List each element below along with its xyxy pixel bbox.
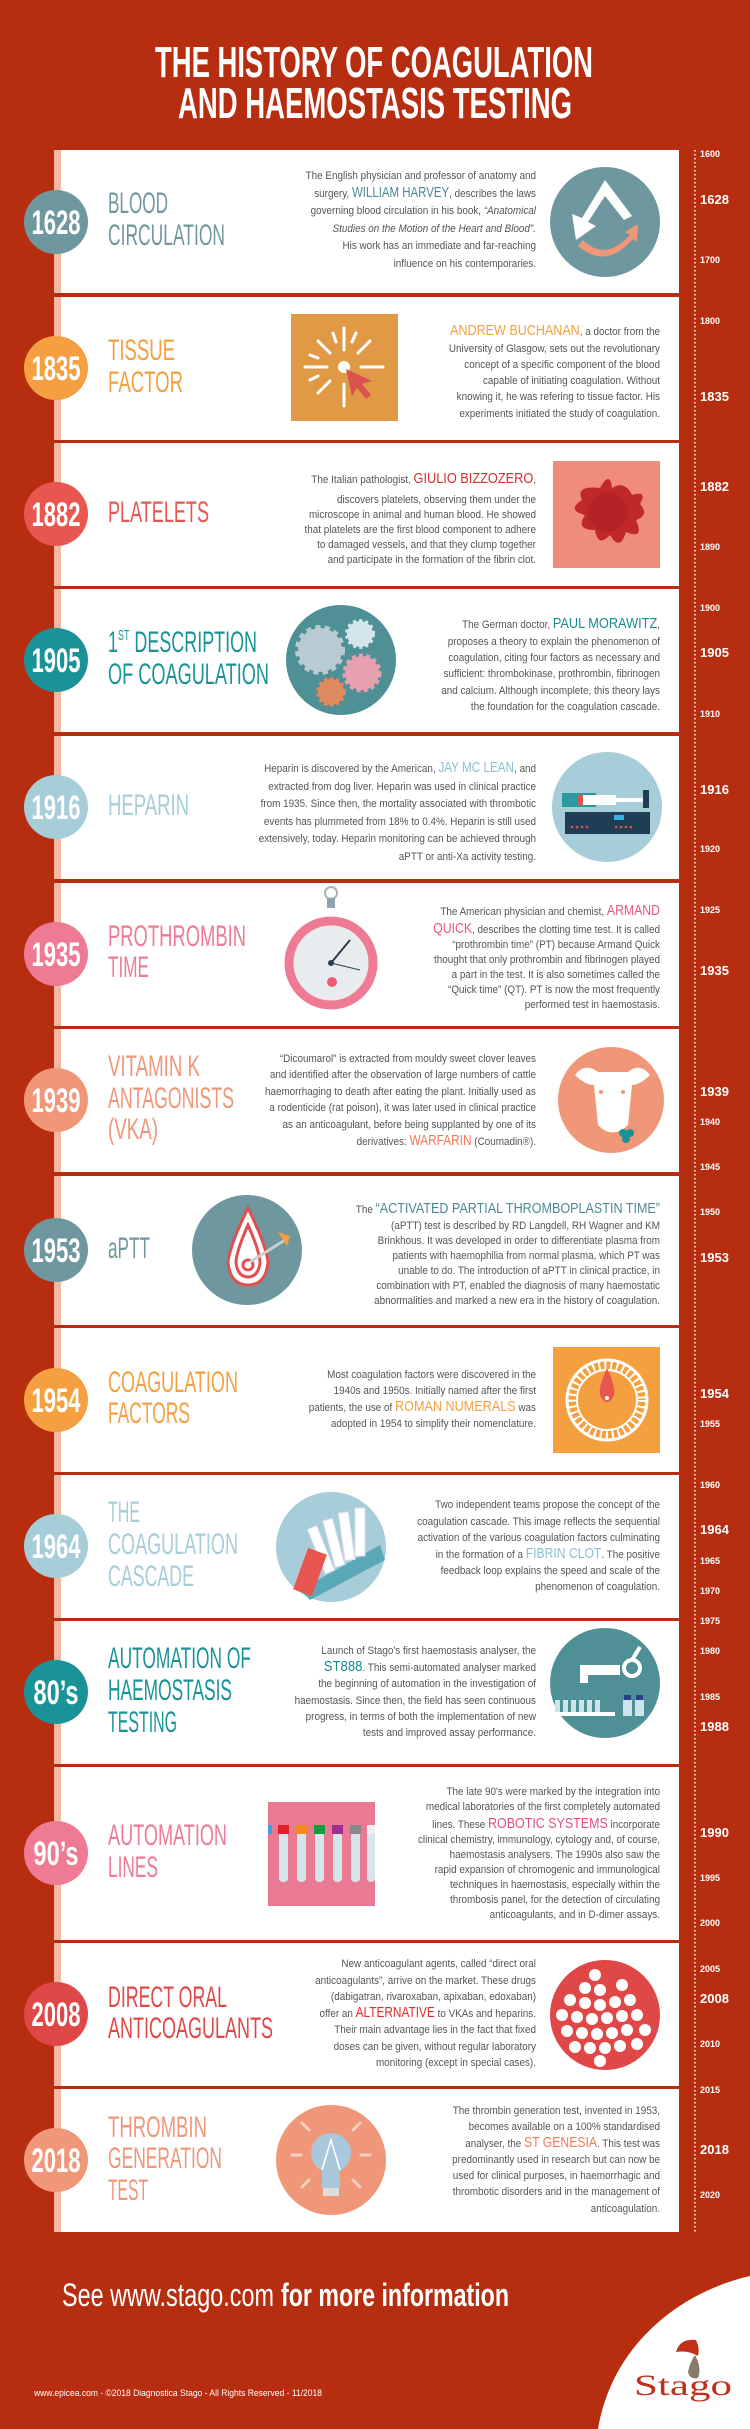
- text block: influence on his contemporaries.: [394, 259, 536, 270]
- heading: [108, 920, 246, 984]
- heading: TIME: [108, 951, 149, 984]
- timeline axis: 1890: [700, 542, 720, 552]
- text block: a part in the test. It is also sometimes called the: [452, 970, 660, 981]
- footer call to action: See www.stago.com: [62, 2277, 274, 2313]
- stago logo corner: [598, 2276, 750, 2429]
- heading: FACTOR: [108, 366, 183, 399]
- text block: that platelets are the first blood component to adhere: [305, 525, 536, 536]
- text block: capable of initiating coagulation. Without: [483, 376, 660, 387]
- text block: as an anticoagulant, before being supplanted by one of its: [283, 1120, 536, 1131]
- panel: 1628 blood circulation: [24, 150, 679, 293]
- text block: The German doctor, PAUL MORAWITZ,: [462, 615, 663, 632]
- timeline axis: 1628: [700, 192, 729, 207]
- heading: AUTOMATION OF: [108, 1642, 251, 1675]
- icon: light bulb: [276, 2105, 386, 2215]
- heading: COAGULATION: [108, 1366, 238, 1399]
- text block: the foundation for the coagulation cascade.: [471, 702, 660, 713]
- timeline axis: 2015: [700, 2085, 720, 2095]
- heading: TISSUE: [108, 334, 175, 367]
- text block: anticoagulants”, arrive on the market. These drugs: [315, 1976, 536, 1987]
- heading: [108, 626, 269, 691]
- heading: (VKA): [108, 1113, 158, 1146]
- badge 90's: 90’s: [34, 1835, 78, 1873]
- text block: “Dicoumarol” is extracted from mouldy sweet clover leaves: [280, 1054, 536, 1065]
- heading: DIRECT ORAL: [108, 1981, 227, 2014]
- badge 2008: [24, 1982, 88, 2046]
- panel: 1835 tissue factor: [24, 297, 679, 440]
- timeline axis: 1995: [700, 1873, 720, 1883]
- icon: syringe pump: [552, 752, 662, 862]
- text block: predominantly used in research but can now be: [452, 2155, 660, 2166]
- panel: 1939 VKA: [24, 1029, 679, 1172]
- badge 1953: [24, 1218, 88, 1282]
- text block: QUICK, describes the clotting time test. It is called: [433, 920, 660, 937]
- text block: (dabigatran, rivaroxaban, apixaban, edoxaban): [331, 1992, 536, 2003]
- timeline axis: 1975: [700, 1616, 720, 1626]
- timeline axis: 2020: [700, 2190, 720, 2200]
- timeline axis: 1965: [700, 1556, 720, 1566]
- text block: lines. These ROBOTIC SYSTEMS incorporate: [432, 1815, 660, 1832]
- badge 1835: [24, 336, 88, 400]
- timeline axis: 1800: [700, 316, 720, 326]
- text block: abnormalities and marked a new era in the history of coagulation.: [374, 1296, 660, 1307]
- text block: The American physician and chemist, ARMAND: [440, 902, 665, 919]
- heading: GENERATION: [108, 2142, 222, 2175]
- icon: circulation arrows: [550, 167, 660, 277]
- timeline axis: 1835: [700, 389, 729, 404]
- badge 1916: [24, 775, 88, 839]
- stago logo corner: Stago: [634, 2369, 732, 2402]
- text block: coagulation, citing four factors as necessary and: [448, 653, 660, 664]
- text block: Two independent teams propose the concept of the: [435, 1500, 660, 1511]
- text block: University of Glasgow, sets out the revolutionary: [449, 344, 661, 355]
- icon: gears: [286, 605, 396, 715]
- badge 1953: 1953: [32, 1232, 80, 1270]
- text block: tests and improved assay performance.: [363, 1728, 536, 1739]
- badge 2018: [24, 2128, 88, 2192]
- timeline axis: 1905: [700, 645, 729, 660]
- text block: sufficient: thrombokinase, prothrombin, fibrinogen: [444, 669, 660, 680]
- panel: 1905 first description: [24, 589, 679, 732]
- text block: surgery, WILLIAM HARVEY, describes the laws: [314, 184, 536, 201]
- text block: activation of the various coagulation factors culminating: [418, 1533, 660, 1544]
- heading: [108, 2111, 222, 2207]
- timeline axis: 1950: [700, 1207, 720, 1217]
- heading: [108, 1819, 227, 1884]
- text block: aPTT or anti-Xa activity testing.: [399, 852, 536, 863]
- text block: from 1935. Since then, the mortality associated with thrombotic: [261, 799, 536, 810]
- badge 1835: 1835: [32, 350, 80, 388]
- timeline axis: 2000: [700, 1918, 720, 1928]
- text block: becomes available on a 100% standardised: [469, 2122, 660, 2133]
- timeline axis: 1980: [700, 1646, 720, 1656]
- panel: 1953 aPTT: [24, 1176, 679, 1325]
- text block: ANDREW BUCHANAN, a doctor from the: [450, 322, 660, 339]
- panel: 90's automation lines: [24, 1767, 679, 1940]
- text block: proposes a theory to explain the phenomenon of: [448, 637, 660, 648]
- heading: HEPARIN: [108, 789, 189, 822]
- text block: analyser, the ST GENESIA. This test was: [465, 2134, 660, 2151]
- heading: [108, 1050, 234, 1146]
- badge 1916: 1916: [32, 789, 80, 827]
- heading: CASCADE: [108, 1560, 194, 1593]
- heading: CIRCULATION: [108, 219, 225, 252]
- text block: 1940s and 1950s. Initially named after the first: [334, 1386, 536, 1397]
- text block: offer an ALTERNATIVE to VKAs and heparins.: [320, 2004, 536, 2021]
- badge 1882: 1882: [32, 496, 80, 534]
- text block: ST888. This semi-automated analyser marked: [324, 1658, 536, 1675]
- timeline axis: 1985: [700, 1692, 720, 1702]
- heading: HAEMOSTASIS: [108, 1674, 232, 1707]
- heading: ANTAGONISTS: [108, 1082, 234, 1115]
- heading: AUTOMATION: [108, 1819, 227, 1852]
- panel: 2008 direct oral anticoagulants: [24, 1943, 679, 2086]
- heading: aPTT: [108, 1232, 150, 1265]
- icon: pills: [550, 1960, 660, 2070]
- badge 1628: 1628: [32, 204, 80, 242]
- text block: clinical chemistry, immunology, cytology and, of course,: [418, 1835, 660, 1846]
- text block: Heparin is discovered by the American, JAY MC LEAN, and: [264, 759, 536, 776]
- badge 1939: [24, 1068, 88, 1132]
- badge 1954: [24, 1368, 88, 1432]
- text block: rapid expansion of chromogenic and immunological: [435, 1865, 660, 1876]
- timeline axis: 1945: [700, 1162, 720, 1172]
- icon: dominoes: [276, 1492, 386, 1602]
- heading: PLATELETS: [108, 496, 209, 529]
- timeline axis: 1988: [700, 1719, 729, 1734]
- text block: knowing it, he was refering to tissue factor. His: [457, 392, 660, 403]
- text block: adopted in 1954 to simplify their nomenclature.: [331, 1419, 536, 1430]
- text block: thought that only prothrombin and fibrinogen played: [434, 955, 660, 966]
- text block: extensively, today. Heparin monitoring can be achieved through: [259, 834, 536, 845]
- text block: and identified after the observation of large numbers of cattle: [270, 1070, 536, 1081]
- icon: stopwatch: [289, 887, 373, 1005]
- text block: events has plummeted from 18% to 0.4%. Heparin is still used: [264, 817, 536, 828]
- timeline axis: 1953: [700, 1250, 729, 1265]
- timeline axis: 1600: [700, 149, 720, 159]
- icon: target drop: [192, 1195, 302, 1305]
- badge 2018: 2018: [32, 2142, 80, 2180]
- badge 1905: 1905: [32, 642, 80, 680]
- text block: thrombosis panel, for the detection of circulating: [450, 1895, 660, 1906]
- timeline axis: 2005: [700, 1964, 720, 1974]
- icon: cow: [558, 1047, 664, 1153]
- heading: [108, 334, 183, 399]
- text block: doses can be given, without regular laboratory: [334, 2042, 537, 2053]
- text block: The thrombin generation test, invented in 1953,: [453, 2106, 660, 2117]
- text block: governing blood circulation in his book, “Anatomical: [311, 206, 536, 217]
- text block: microscope in animal and human blood. He showed: [309, 510, 536, 521]
- icon: tube rack: [268, 1802, 375, 1906]
- timeline axis: 2018: [700, 2142, 729, 2157]
- badge 2008: 2008: [32, 1996, 80, 2034]
- panel: 80's automation of haemostasis testing: [24, 1621, 679, 1764]
- heading: THE: [108, 1496, 140, 1529]
- timeline axis: 1954: [700, 1386, 730, 1401]
- text block: to damaged vessels, and that they clump together: [317, 540, 536, 551]
- text block: unable to do. The introduction of aPTT in clinical practice, in: [398, 1266, 660, 1277]
- text block: concept of a specific component of the blood: [464, 360, 660, 371]
- badge 1964: 1964: [32, 1528, 81, 1566]
- panel: 1964 coagulation cascade: [24, 1475, 679, 1618]
- icon: analyser: [550, 1628, 660, 1738]
- timeline axis: 1939: [700, 1084, 729, 1099]
- timeline axis: 1970: [700, 1586, 720, 1596]
- timeline axis: 1920: [700, 844, 720, 854]
- timeline axis: 1900: [700, 603, 720, 613]
- footer call to action: [62, 2277, 509, 2313]
- badge 80's: 80’s: [34, 1674, 78, 1712]
- text block: The Italian pathologist, GIULIO BIZZOZERO,: [311, 470, 540, 487]
- text block: Most coagulation factors were discovered in the: [327, 1370, 536, 1381]
- text block: patients, the use of ROMAN NUMERALS was: [309, 1398, 536, 1415]
- panel: 1882 platelets: [24, 443, 679, 586]
- text block: (aPTT) test is described by RD Langdell, RH Wagner and KM: [391, 1221, 660, 1232]
- icon: platelet: [553, 461, 660, 568]
- timeline axis: 1990: [700, 1825, 729, 1840]
- heading: COAGULATION: [108, 1528, 238, 1561]
- panel: 1935 prothrombin time: [24, 883, 679, 1026]
- timeline axis: 1955: [700, 1419, 720, 1429]
- text block: the beginning of automation in the investigation of: [318, 1679, 536, 1690]
- timeline axis: 1960: [700, 1480, 720, 1490]
- text block: performed test in haemostasis.: [525, 1000, 660, 1011]
- heading: ANTICOAGULANTS: [108, 2012, 273, 2045]
- badge 90's: [24, 1821, 88, 1885]
- text block: patients with haemophilia from normal plasma, which PT was: [393, 1251, 660, 1262]
- heading: PROTHROMBIN: [108, 920, 246, 953]
- heading: DESCRIPTION: [129, 626, 257, 659]
- panel: 1916 heparin: [24, 736, 679, 879]
- badge 1905: [24, 628, 88, 692]
- text block: and participate in the formation of the fibrin clot.: [328, 555, 536, 566]
- text block: combination with PT, enabled the diagnosis of many haemostatic: [376, 1281, 660, 1292]
- text block: anticoagulation.: [591, 2204, 660, 2215]
- text block: experiments initiated the study of coagulation.: [459, 409, 660, 420]
- text block: Their main advantage lies in the fact that fixed: [334, 2025, 536, 2036]
- badge 1964: [24, 1514, 88, 1578]
- heading: [108, 1496, 238, 1593]
- badge 1935: 1935: [32, 936, 80, 974]
- panel: 1954 coagulation factors: [24, 1328, 679, 1472]
- timeline axis: 1916: [700, 782, 729, 797]
- heading: THROMBIN: [108, 2111, 207, 2144]
- heading: [108, 1366, 238, 1430]
- text block: Studies on the Motion of the Heart and Blood”.: [333, 224, 536, 235]
- heading: LINES: [108, 1851, 158, 1884]
- timeline axis: 1882: [700, 479, 729, 494]
- title: [155, 38, 593, 128]
- text block: medical laboratories of the first completely automated: [426, 1802, 660, 1813]
- text block: discovers platelets, observing them under the: [337, 495, 536, 506]
- text block: in the formation of a FIBRIN CLOT. The positive: [436, 1545, 660, 1562]
- heading: [108, 1981, 273, 2045]
- text block: derivatives: WARFARIN (Coumadin®).: [357, 1132, 536, 1149]
- text block: and calcium. Although incomplete, this theory lays: [441, 686, 660, 697]
- timeline axis: 1910: [700, 709, 720, 719]
- text block: coagulation cascade. This image reflects the sequential: [417, 1517, 660, 1528]
- icon: click burst: [291, 314, 398, 421]
- text block: Launch of Stago's first haemostasis analyser, the: [321, 1646, 536, 1657]
- text block: phenomenon of coagulation.: [535, 1582, 660, 1593]
- heading: VITAMIN K: [108, 1050, 200, 1083]
- text block: a rodenticide (rat poison), it was later used in clinical practice: [269, 1103, 536, 1114]
- badge 80's: [24, 1660, 88, 1724]
- text block: The English physician and professor of anatomy and: [306, 171, 536, 182]
- text block: “prothrombin time” (PT) because Armand Quick: [452, 940, 661, 951]
- text block: Brinkhous. It was developed in order to differentiate plasma from: [378, 1236, 660, 1247]
- heading: ST: [118, 627, 129, 644]
- icon: roman clock: [553, 1347, 660, 1453]
- text block: progress, in terms of both the implementation of new: [306, 1712, 536, 1723]
- timeline axis: 2008: [700, 1991, 729, 2006]
- text block: haemostasis analysers. The 1990s also saw the: [450, 1850, 660, 1861]
- heading: BLOOD: [108, 187, 168, 220]
- text block: monitoring (except in special cases).: [376, 2058, 536, 2069]
- badge 1628: [24, 190, 88, 254]
- text block: anticoagulants, and in D-dimer assays.: [490, 1910, 660, 1921]
- text block: His work has an immediate and far-reaching: [343, 241, 536, 252]
- timeline axis: 2010: [700, 2039, 720, 2049]
- heading: [108, 1642, 251, 1739]
- panel: 2018 thrombin generation test: [24, 2089, 679, 2232]
- text block: The late 90's were marked by the integration into: [446, 1787, 660, 1798]
- text block: haemostasis. Since then, the field has seen continuous: [295, 1696, 536, 1707]
- text block: techniques in haemostasis, especially within the: [450, 1880, 660, 1891]
- text block: haemorrhaging to death after eating the plant. Initially used as: [265, 1087, 536, 1098]
- footer call to action: for more information: [281, 2277, 509, 2313]
- badge 1939: 1939: [32, 1082, 80, 1120]
- badge 1954: 1954: [32, 1382, 81, 1420]
- badge 1882: [24, 482, 88, 546]
- timeline axis: 1964: [700, 1522, 730, 1537]
- badge 1935: [24, 922, 88, 986]
- text block: extracted from dog liver. Heparin was used in clinical practice: [268, 782, 536, 793]
- timeline axis: 1940: [700, 1117, 720, 1127]
- text block: used for clinical purposes, in haemorrhagic and: [453, 2171, 660, 2182]
- copyright: www.epicea.com - ©2018 Diagnostica Stago - All Rights Reserved - 11/2018: [33, 2388, 322, 2398]
- heading: TESTING: [108, 1706, 177, 1739]
- text block: feedback loop explains the speed and scale of the: [441, 1566, 660, 1577]
- timeline axis: [695, 149, 730, 2232]
- heading: TEST: [108, 2174, 148, 2207]
- heading: [108, 187, 225, 252]
- timeline axis: 1925: [700, 905, 720, 915]
- timeline axis: 1700: [700, 255, 720, 265]
- text block: The “ACTIVATED PARTIAL THROMBOPLASTIN TIME”: [356, 1200, 681, 1217]
- heading: 1: [108, 626, 125, 659]
- text block: thrombotic disorders and in the management of: [453, 2187, 660, 2198]
- text block: “Quick time” (QT). PT is now the most frequently: [448, 985, 661, 996]
- timeline axis: 1935: [700, 963, 729, 978]
- heading: FACTORS: [108, 1397, 190, 1430]
- heading: OF COAGULATION: [108, 658, 269, 691]
- text block: New anticoagulant agents, called “direct oral: [341, 1959, 536, 1970]
